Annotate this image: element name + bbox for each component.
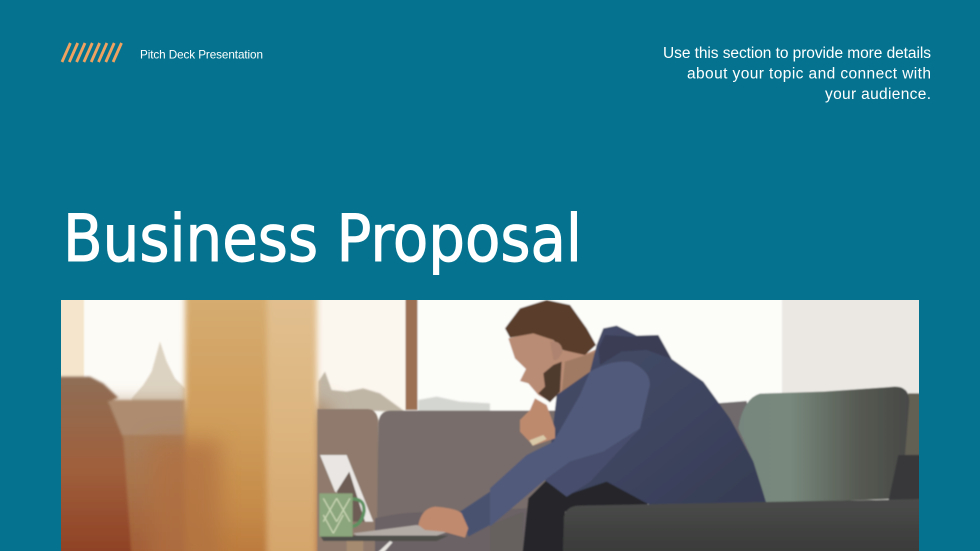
deck label: Pitch Deck Presentation (140, 48, 263, 62)
blurred foreground pillar (185, 290, 317, 551)
sofa seat arm (563, 499, 923, 551)
sleeve (490, 361, 650, 527)
description text block: your audience. (825, 86, 931, 103)
watch (529, 435, 547, 446)
laptop, mug and table (319, 455, 448, 551)
blend of pillar into lower left (150, 440, 220, 551)
title: Business Proposal (63, 202, 582, 277)
description text block: Use this section to provide more details (663, 45, 931, 62)
icon: orange diagonal stripes (62, 43, 122, 62)
neck and face (508, 332, 598, 402)
hoodie body (547, 326, 767, 505)
blurred coat (53, 377, 185, 551)
grey sofa (316, 408, 567, 551)
photo: man working on laptop on a sofa (50, 290, 925, 551)
man (490, 300, 767, 551)
hair (505, 300, 596, 355)
left sofa back, blurred (112, 390, 338, 551)
hand at chin (520, 398, 555, 446)
window background (61, 300, 919, 506)
description text block: about your topic and connect with (687, 66, 931, 82)
distant trees and hills (132, 342, 490, 413)
window post (406, 295, 418, 410)
trousers (522, 480, 649, 551)
description text block (663, 45, 931, 103)
hand on laptop (418, 492, 490, 538)
right sofa (718, 386, 919, 504)
